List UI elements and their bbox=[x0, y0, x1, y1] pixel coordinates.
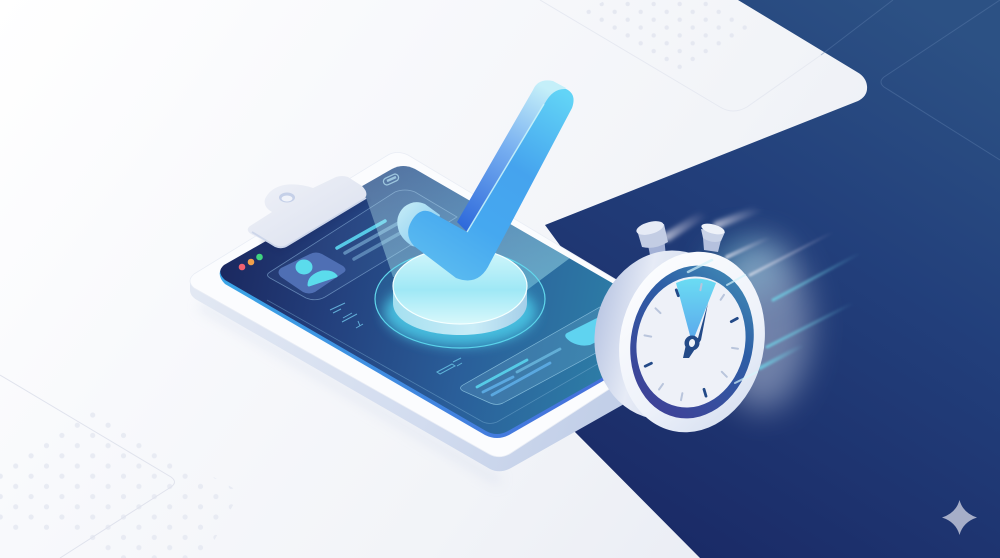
disc side bbox=[393, 286, 527, 335]
check front face bbox=[408, 89, 574, 280]
lower card tile bbox=[460, 306, 600, 405]
dot pattern: lower left bbox=[0, 408, 240, 558]
glowing disc bbox=[375, 248, 545, 348]
front bezel bbox=[603, 238, 781, 446]
clip shadow bbox=[262, 200, 368, 251]
outline: lower left card bbox=[0, 375, 174, 558]
motion streaks bbox=[667, 208, 860, 368]
motion blur haze bbox=[714, 240, 810, 410]
tablet shadow bbox=[200, 305, 500, 482]
outline: navy panel lines bbox=[821, 0, 1000, 160]
lower card text lines bbox=[477, 349, 560, 395]
tablet bbox=[190, 152, 623, 472]
stopwatch body bbox=[579, 237, 757, 433]
stopwatch bbox=[579, 219, 781, 446]
timer wedge bbox=[676, 278, 716, 343]
disc top bbox=[393, 248, 527, 324]
clip hole bbox=[279, 192, 295, 202]
clock face bbox=[624, 266, 758, 418]
profile text lines bbox=[337, 221, 402, 259]
window dots bbox=[239, 254, 263, 270]
minor ticks bbox=[644, 284, 738, 400]
check long-arm side face bbox=[457, 80, 566, 232]
small code marks bbox=[437, 358, 462, 374]
light beam bbox=[361, 165, 570, 290]
clip body bbox=[248, 176, 366, 247]
clip edge bbox=[252, 198, 366, 247]
inner dark ring bbox=[616, 254, 768, 430]
major ticks bbox=[645, 290, 737, 396]
right crown button bbox=[700, 222, 726, 252]
tablet slab side bbox=[190, 280, 640, 471]
avatar body bbox=[309, 272, 336, 285]
dot pattern: upper right bbox=[584, 0, 750, 73]
glass streaks bbox=[688, 260, 757, 383]
lower card button bbox=[565, 318, 597, 346]
sparkle icon bbox=[942, 500, 977, 535]
teal haze behind bezel bbox=[707, 240, 783, 300]
check highlight bbox=[467, 104, 544, 232]
avatar tile bbox=[278, 252, 346, 294]
outline: upper card bbox=[540, 0, 821, 111]
disc ring bbox=[375, 250, 545, 348]
lower card bbox=[460, 306, 600, 405]
screen bbox=[220, 166, 690, 434]
check mark bbox=[397, 80, 574, 280]
clipboard clip bbox=[248, 176, 368, 251]
navy diagonal panel bbox=[545, 0, 1000, 558]
battery icon bbox=[382, 173, 400, 186]
check short-arm back face bbox=[397, 202, 440, 250]
clock hand bbox=[683, 303, 708, 358]
disc glow bbox=[384, 278, 536, 346]
screen contents bbox=[267, 165, 620, 424]
avatar head bbox=[296, 260, 312, 274]
screen rim bbox=[220, 169, 690, 438]
small chart marks bbox=[330, 303, 363, 328]
tablet slab top bbox=[190, 152, 700, 457]
left crown button bbox=[635, 219, 668, 260]
screen inner outline bbox=[267, 300, 620, 424]
profile card outline bbox=[268, 190, 457, 300]
